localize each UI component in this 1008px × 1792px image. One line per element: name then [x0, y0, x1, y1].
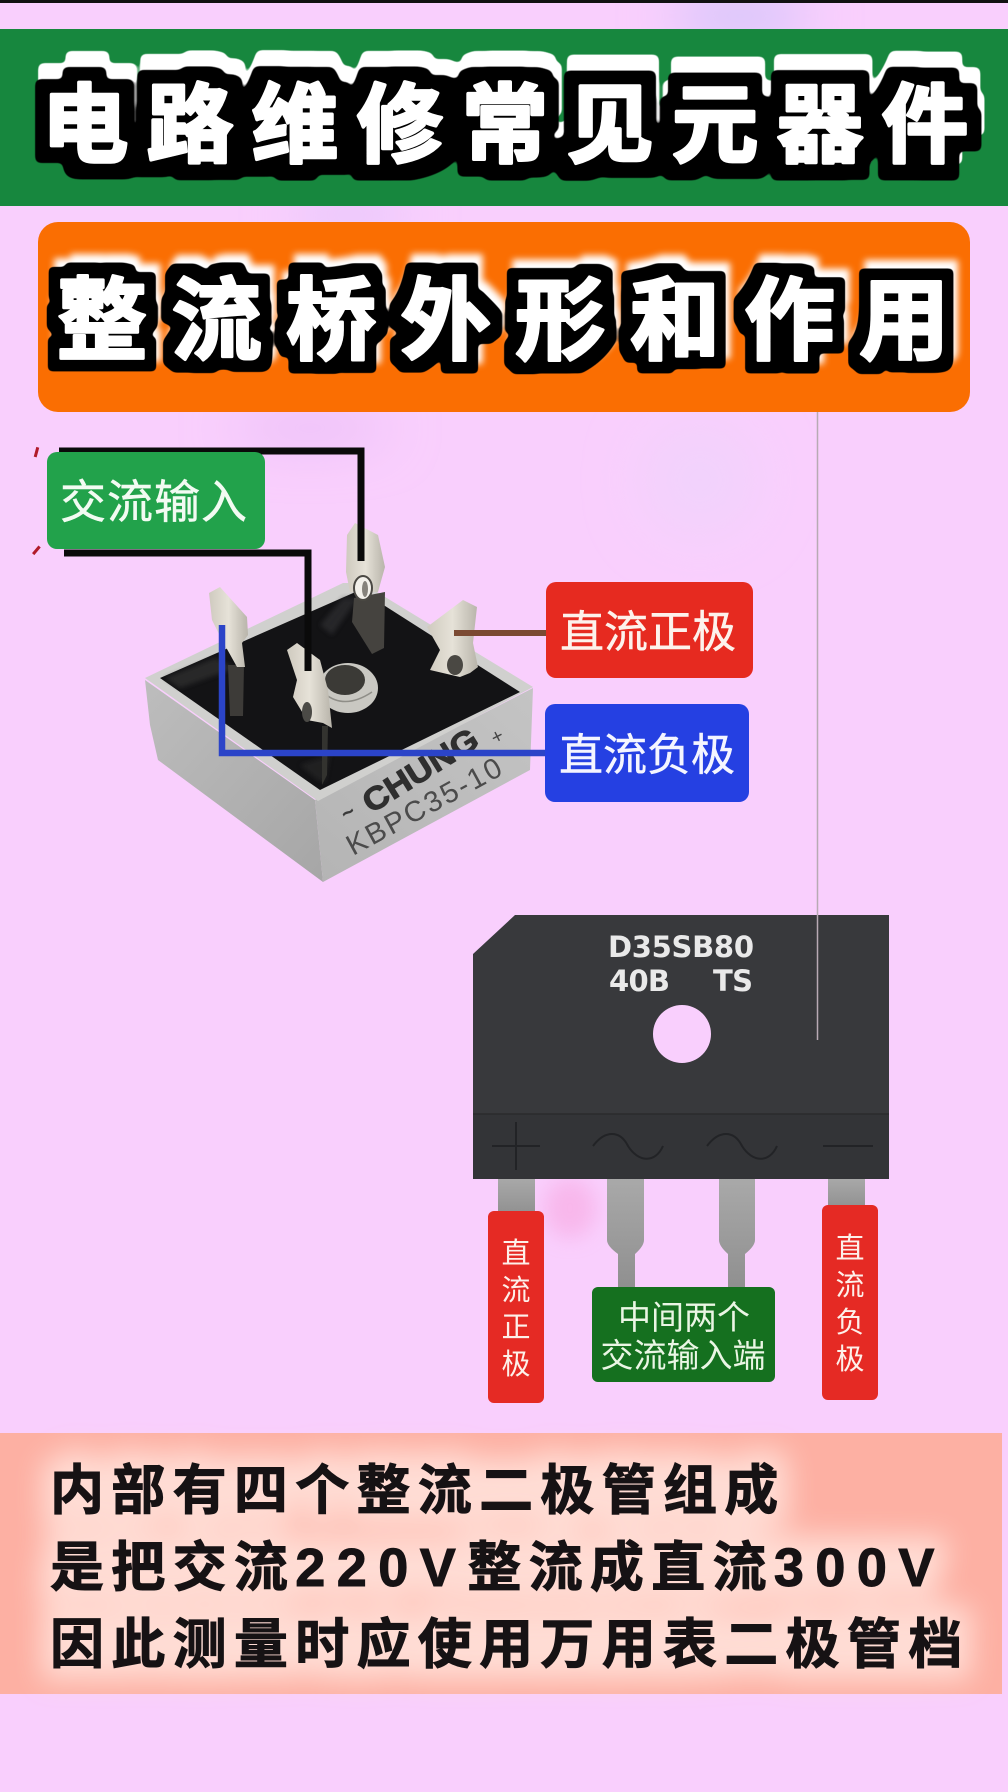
- explanation text: 因此测量时应使用万用表二极管档: [50, 1600, 970, 1679]
- label: two middle AC pins: [592, 1287, 775, 1382]
- centre mounting ring: [318, 663, 378, 713]
- part marking: ~: [336, 798, 360, 826]
- explanation text: 是把交流220V整流成直流300V: [50, 1523, 946, 1602]
- decoration marks by AC label: [32, 447, 41, 555]
- lead 1: [498, 1178, 535, 1216]
- black recess: [160, 590, 520, 790]
- title band: [0, 29, 1008, 206]
- top rim: [145, 583, 533, 801]
- icon: KBPC35-10 bridge rectifier photo: [145, 523, 533, 882]
- label: DC negative vertical: 负: [835, 1299, 865, 1341]
- package body with mounting hole: [473, 915, 889, 1179]
- label: DC negative vertical: 直: [835, 1225, 865, 1267]
- front tab: [287, 643, 332, 785]
- polarity symbols: [492, 1122, 873, 1170]
- label: DC negative vertical: [822, 1205, 878, 1400]
- wire: DC negative: [222, 625, 547, 753]
- label: two middle AC pins: 中间两个: [618, 1291, 750, 1339]
- icon: GBJ bridge rectifier: [473, 915, 889, 1290]
- label: DC positive vertical: 流: [501, 1267, 531, 1309]
- right tab: [427, 600, 478, 677]
- icon: KBPC35-10 bridge rectifier photo: CHUNG: [356, 721, 485, 820]
- label: DC negative: [545, 704, 749, 802]
- explanation panel: [0, 1433, 1002, 1694]
- label: DC negative vertical: 流: [835, 1262, 865, 1304]
- label: DC positive vertical: 直: [501, 1230, 531, 1272]
- label: AC input: [47, 452, 265, 549]
- label: AC input: 交流输入: [60, 466, 248, 532]
- label: DC positive: [546, 582, 753, 678]
- icon: KBPC35-10 bridge rectifier photo: KBPC35-10: [341, 752, 507, 862]
- thin vertical leader line: [816, 412, 818, 1040]
- explanation text: [50, 1446, 970, 1679]
- wires: AC input: [59, 451, 361, 671]
- subtitle panel: [38, 222, 974, 412]
- lead 2: [607, 1178, 644, 1290]
- marking: D35SB80: [608, 930, 754, 964]
- recess shading: [165, 598, 358, 782]
- explanation text: 内部有四个整流二极管组成: [50, 1446, 786, 1525]
- lead 4: [828, 1178, 865, 1210]
- label: two middle AC pins: 交流输入端: [600, 1329, 766, 1377]
- label: DC negative vertical: 极: [835, 1336, 865, 1378]
- icon: GBJ bridge rectifier: 40B: [609, 964, 670, 998]
- icon: GBJ bridge rectifier: TS: [713, 964, 753, 998]
- subtitle text: 整流桥外形和作用: [57, 248, 974, 378]
- label: DC positive: 直流正极: [560, 596, 736, 660]
- left tab: [209, 587, 248, 716]
- label: DC negative: 直流负极: [559, 719, 735, 783]
- icon: KBPC35-10 bridge rectifier photo: +: [487, 725, 508, 749]
- right face: [315, 688, 533, 882]
- wire: DC positive: [454, 630, 547, 636]
- label: DC positive vertical: 正: [501, 1304, 531, 1346]
- label: DC positive vertical: 极: [501, 1341, 531, 1383]
- left face: [145, 680, 323, 882]
- back tab: [346, 523, 385, 654]
- pink glow near lead: [544, 1178, 596, 1238]
- title text: 电路维修常见元器件: [42, 55, 987, 180]
- label: DC positive vertical: [488, 1211, 544, 1403]
- lead 3: [719, 1178, 755, 1290]
